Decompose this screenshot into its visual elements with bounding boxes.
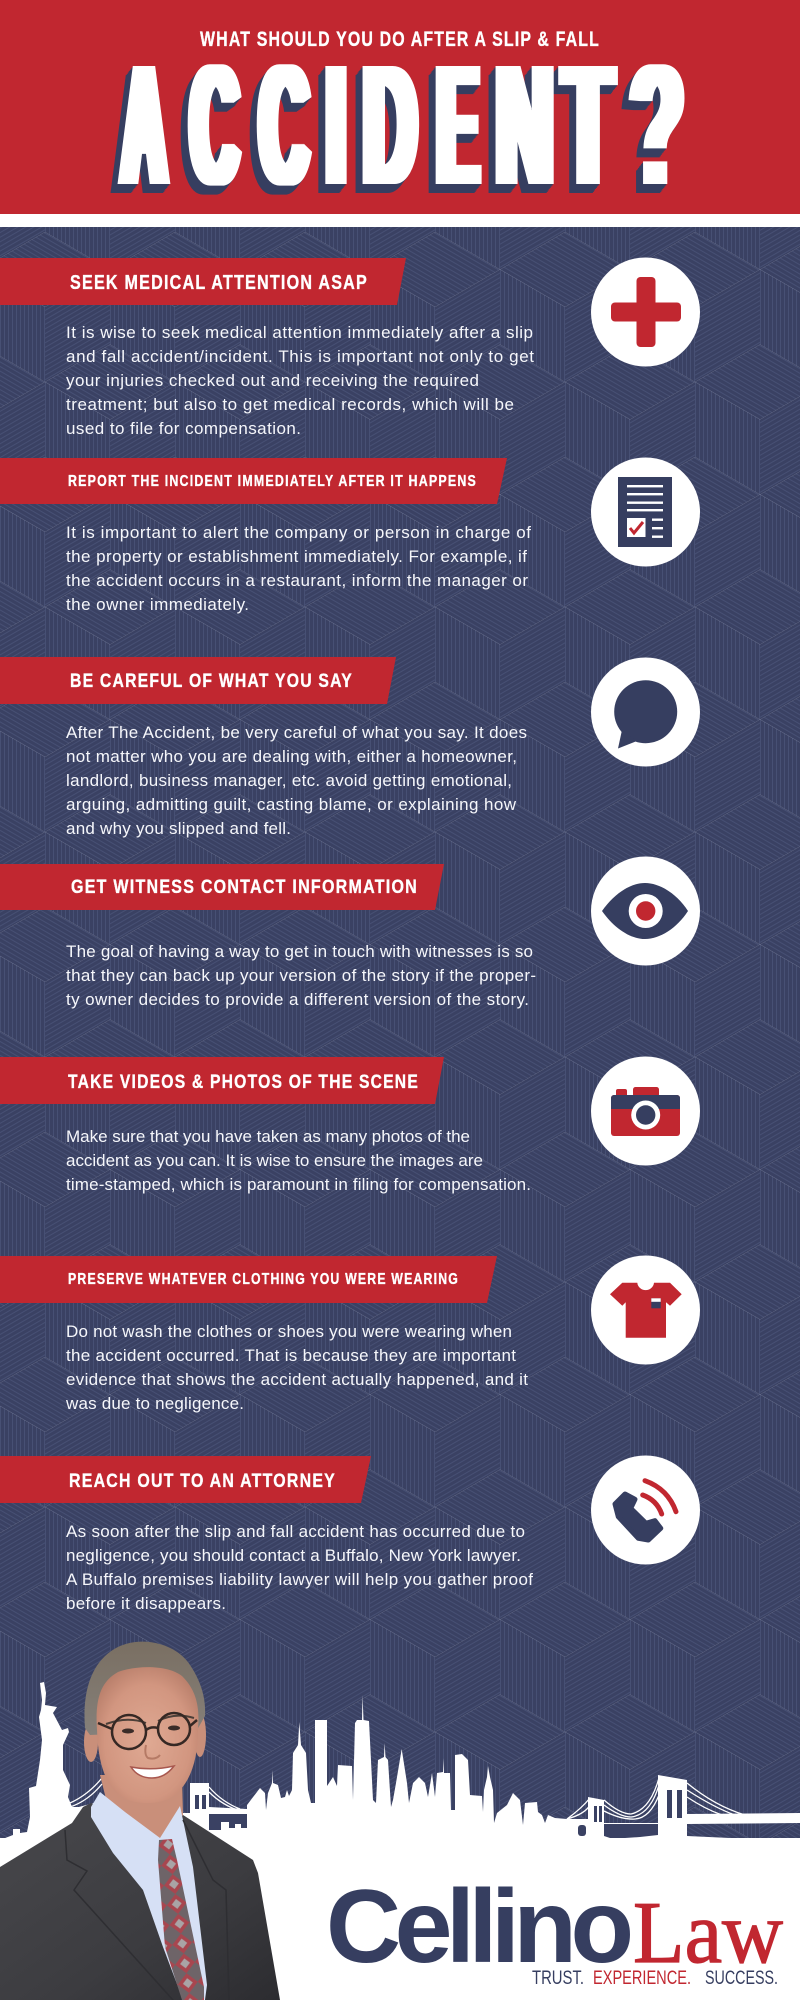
body text 5: Make sure that you have taken as many photos of the — [66, 1127, 470, 1146]
title: ACCIDENT?: I — [327, 30, 345, 221]
body text 3: landlord, business manager, etc. avoid getting emotional, — [66, 771, 512, 790]
jagged shoreline strip — [604, 1824, 658, 1838]
eyebrows — [106, 1716, 194, 1724]
body text 4 — [66, 942, 536, 1009]
body text 6 — [65, 1322, 528, 1413]
eyes — [122, 1728, 134, 1734]
section 4: witness contact information — [0, 856, 700, 1009]
smile — [131, 1766, 174, 1778]
heading 5: TAKE VIDEOS & PHOTOS OF THE SCENE — [68, 1071, 419, 1093]
heading 1: SEEK MEDICAL ATTENTION ASAP — [70, 272, 368, 294]
body text 7 — [66, 1522, 533, 1613]
icon: phone — [591, 1456, 700, 1564]
body text 5 — [66, 1127, 531, 1194]
body text 2: It is important to alert the company or person in charge of — [66, 523, 531, 542]
title: ACCIDENT?: ? — [630, 30, 684, 221]
heading 6: PRESERVE WHATEVER CLOTHING YOU WERE WEARING — [68, 1271, 459, 1288]
jacket lapels — [65, 1820, 229, 2000]
title: ACCIDENT?: C — [191, 30, 238, 221]
body text 1: and fall accident/incident. This is important not only to get — [66, 347, 534, 366]
banner 4 — [0, 864, 444, 910]
body text 6: Do not wash the clothes or shoes you were wearing when — [66, 1322, 512, 1341]
body text 2: the accident occurs in a restaurant, inform the manager or — [66, 571, 528, 590]
body text 1: your injuries checked out and receiving the required — [66, 371, 479, 390]
left bridge — [70, 1778, 240, 1811]
body text 1 — [66, 323, 534, 438]
body text 2: the owner immediately. — [66, 595, 249, 614]
body text 1: used to file for compensation. — [66, 419, 301, 438]
heading 7: REACH OUT TO AN ATTORNEY — [69, 1470, 336, 1492]
tagline: EXPERIENCE. — [593, 1968, 691, 1989]
banner 3 — [0, 657, 396, 704]
body text 4: The goal of having a way to get in touch with witnesses is so — [66, 942, 533, 961]
title: ACCIDENT?: C — [260, 30, 308, 221]
skyline silhouette — [0, 1682, 800, 1880]
body text 1: It is wise to seek medical attention immediately after a slip — [66, 323, 533, 342]
section 6: preserve clothing — [0, 1256, 700, 1413]
body text 6: was due to negligence. — [65, 1394, 244, 1413]
banner 1 — [0, 258, 406, 305]
body text 2: the property or establishment immediately. For example, if — [66, 547, 527, 566]
body text 7: negligence, you should contact a Buffalo, New York lawyer. — [66, 1546, 521, 1565]
banner 2 — [0, 458, 507, 504]
body text 3: and why you slipped and fell. — [66, 819, 291, 838]
tie — [158, 1839, 204, 2000]
heading 3: BE CAREFUL OF WHAT YOU SAY — [70, 670, 353, 692]
hair — [84, 1642, 205, 1735]
body text 6: evidence that shows the accident actually happened, and it — [66, 1370, 528, 1389]
banner 6 — [0, 1256, 497, 1303]
icon: camera — [591, 1056, 700, 1166]
body text 5: time-stamped, which is paramount in filing for compensation. — [66, 1175, 531, 1194]
logo word: Cellino: Cellino — [326, 1869, 634, 1985]
subtitle: WHAT SHOULD YOU DO AFTER A SLIP & FALL — [200, 28, 600, 51]
neck — [100, 1775, 183, 1840]
bridge tower openings — [578, 1790, 682, 1836]
body text 4: that they can back up your version of the story if the proper- — [66, 966, 536, 985]
title: ACCIDENT?: A — [122, 30, 166, 221]
body text 7: As soon after the slip and fall accident has occurred due to — [66, 1522, 525, 1541]
nose shadow — [145, 1745, 160, 1759]
body text 3: not matter who you are dealing with, either a homeowner, — [66, 747, 517, 766]
glasses — [98, 1713, 197, 1749]
body text 5: accident as you can. It is wise to ensure the images are — [66, 1151, 483, 1170]
footer: white New York skyline — [0, 1682, 800, 2000]
body text 6: the accident occurred. That is because they are important — [66, 1346, 516, 1365]
body text 2 — [66, 523, 531, 614]
body text 1: treatment; but also to get medical records, which will be — [66, 395, 514, 414]
section 1: seek medical attention — [0, 258, 700, 438]
right bridge cables — [567, 1778, 745, 1819]
section 3: be careful what you say — [0, 657, 700, 838]
icon: checklist document — [591, 458, 700, 566]
body text 3: After The Accident, be very careful of what you say. It does — [66, 723, 527, 742]
shirt — [91, 1792, 207, 2000]
icon: t-shirt — [591, 1256, 700, 1364]
body text 3: arguing, admitting guilt, casting blame, or explaining how — [66, 795, 517, 814]
tagline: TRUST. — [532, 1968, 584, 1989]
ears — [84, 1722, 98, 1762]
title: ACCIDENT?: T — [563, 30, 613, 221]
section 5: videos and photos — [0, 1056, 700, 1194]
title: ACCIDENT?: E — [438, 30, 478, 221]
logo word: Law: Law — [633, 1885, 783, 1982]
section 7: reach out to an attorney — [0, 1456, 700, 1613]
icon: eye — [591, 856, 700, 966]
banner 7 — [0, 1456, 371, 1503]
icon: medical cross — [591, 258, 700, 366]
body text 3 — [66, 723, 527, 838]
banner 5 — [0, 1057, 444, 1104]
body text 7: A Buffalo premises liability lawyer will help you gather proof — [66, 1570, 533, 1589]
logo: CellinoLaw — [326, 1869, 783, 1989]
jacket — [0, 1803, 280, 2000]
body text 4: ty owner decides to provide a different version of the story. — [66, 990, 529, 1009]
heading 4: GET WITNESS CONTACT INFORMATION — [71, 876, 418, 898]
white ground — [0, 1838, 800, 2000]
tagline: SUCCESS. — [705, 1968, 778, 1989]
section 2: report the incident — [0, 458, 700, 614]
icon: speech bubble — [591, 658, 700, 766]
heading 2: REPORT THE INCIDENT IMMEDIATELY AFTER IT HAPPENS — [68, 473, 477, 490]
header panel — [0, 0, 800, 221]
left bridge under-deck gap — [209, 1814, 247, 1830]
title: ACCIDENT?: N — [496, 30, 553, 221]
face — [97, 1667, 198, 1803]
title: ACCIDENT?: D — [364, 30, 416, 221]
attorney portrait — [0, 1642, 280, 2000]
body text 7: before it disappears. — [66, 1594, 226, 1613]
